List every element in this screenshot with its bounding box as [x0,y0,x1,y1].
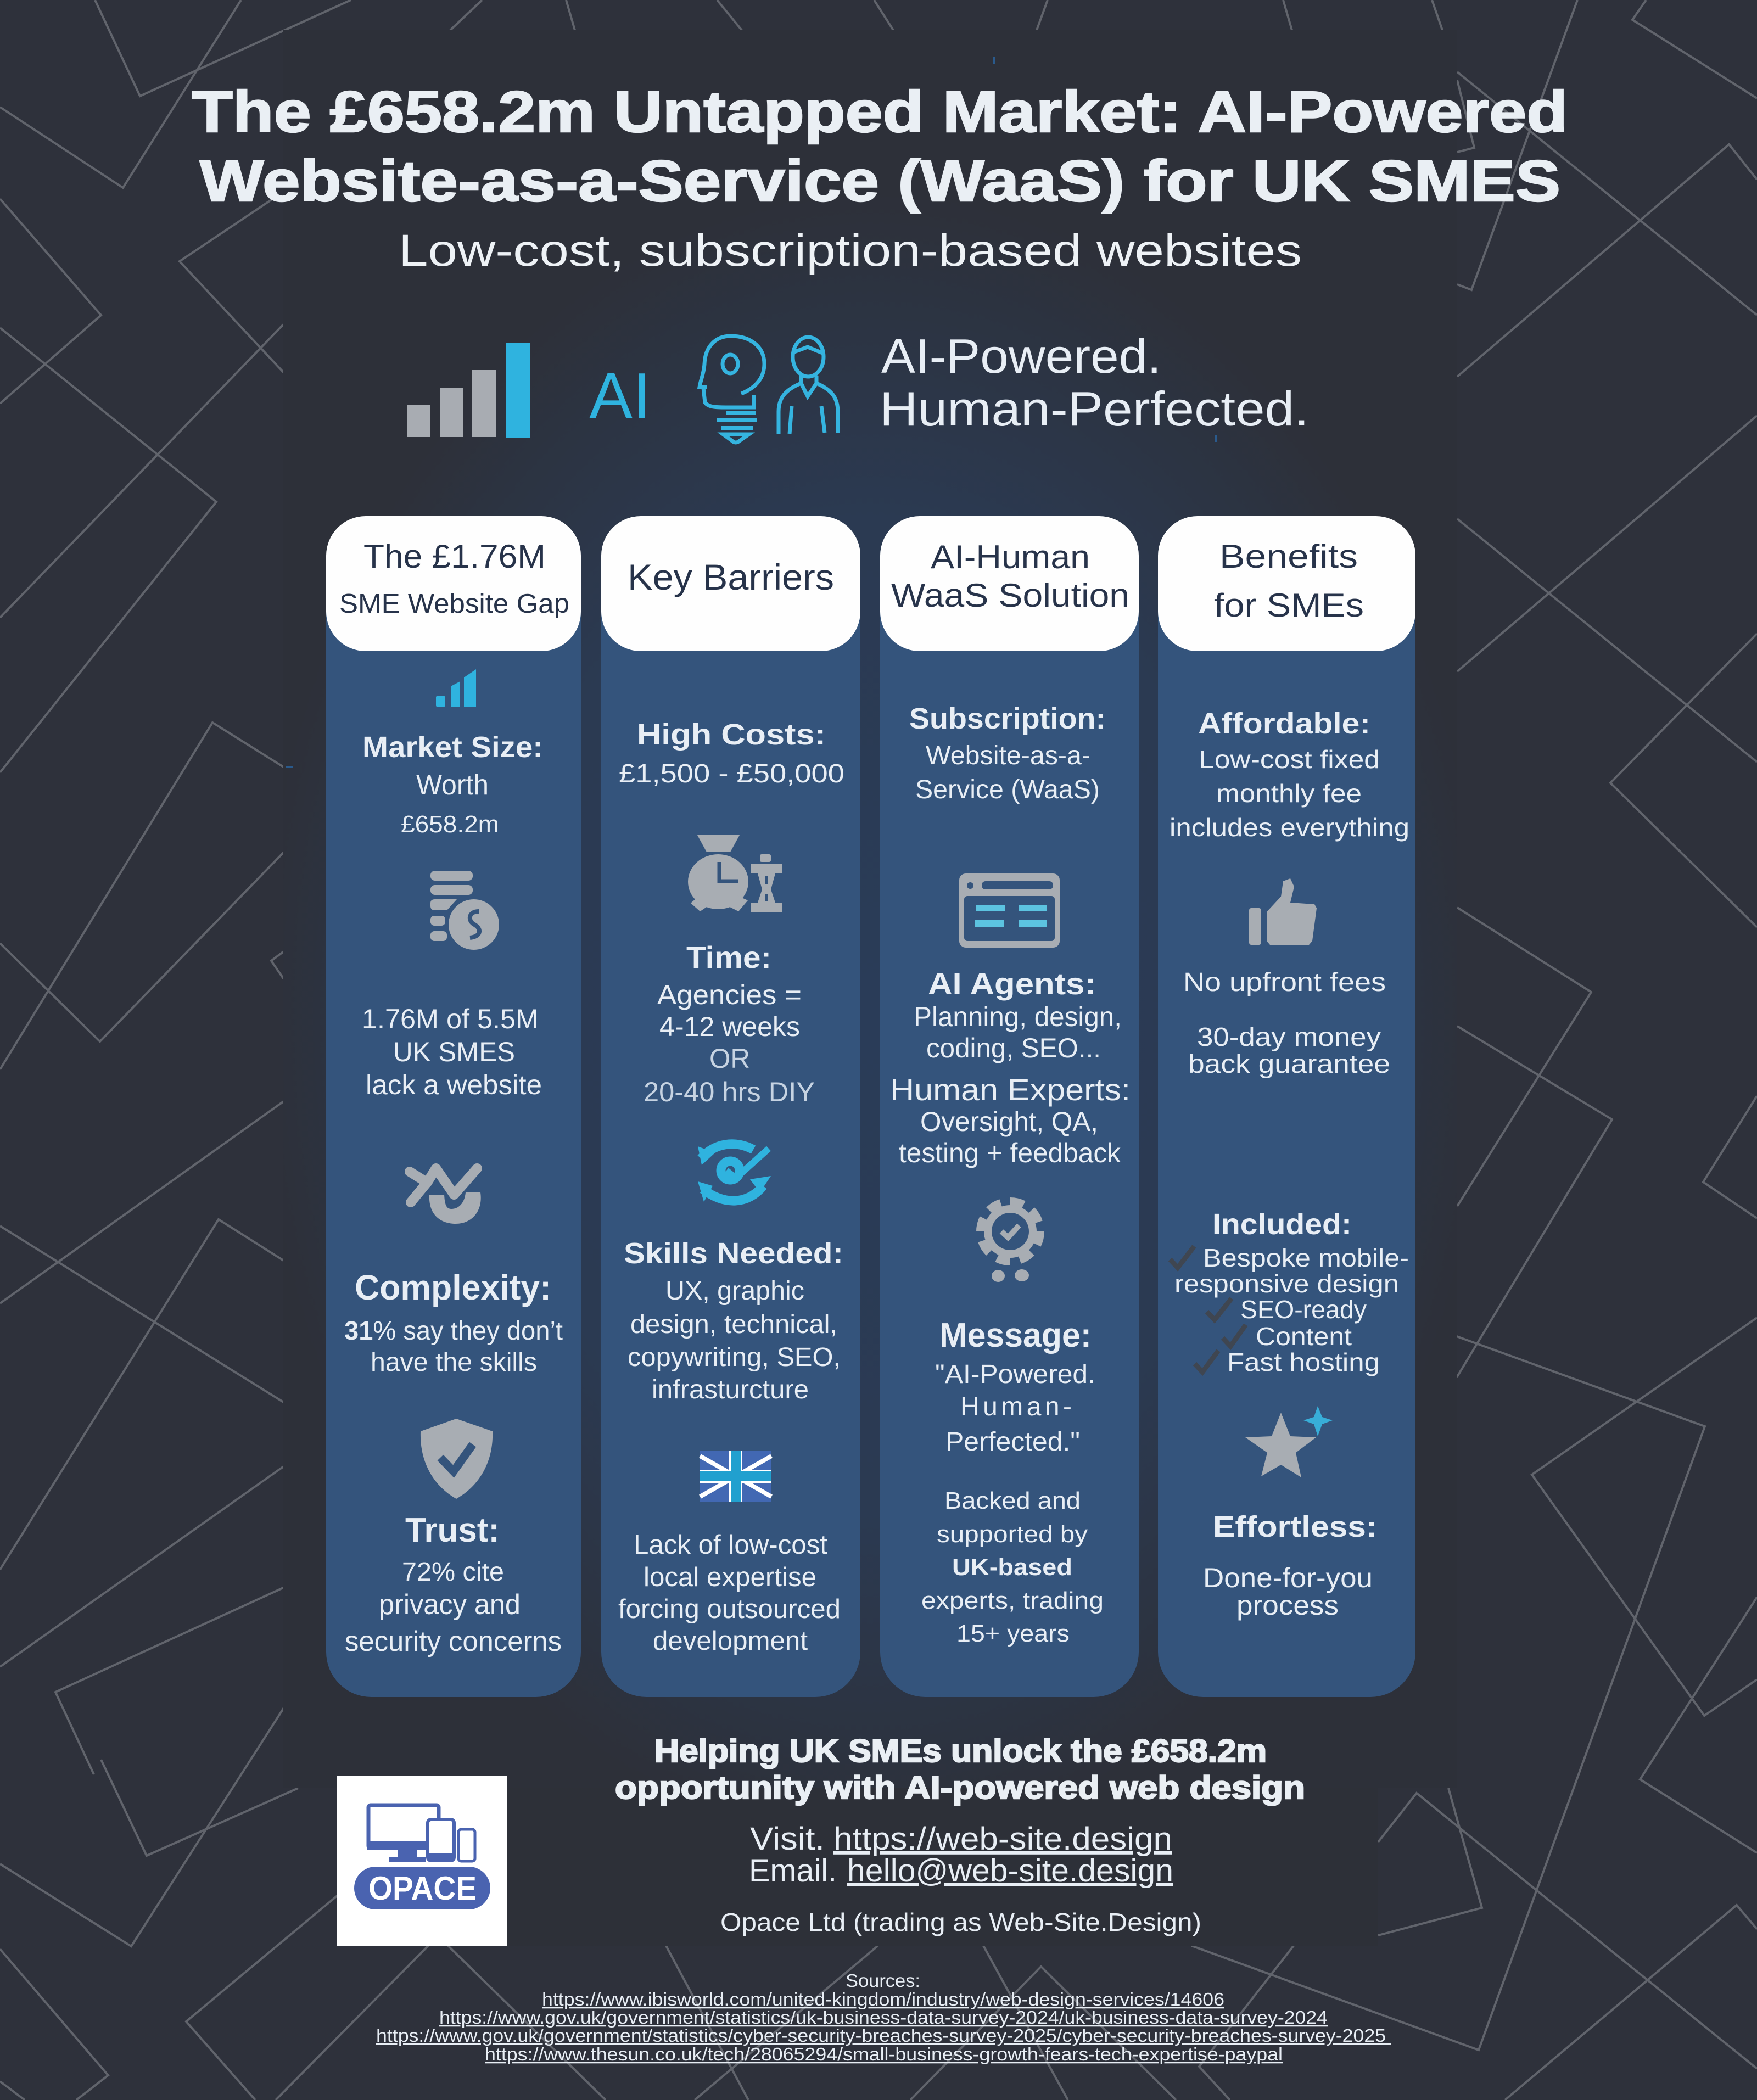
complexity text [344,1268,563,1377]
UK-based backing text: UK-based [952,1554,1072,1581]
title: Website-as-a-Service (WaaS) for UK SMES [200,149,1560,214]
time text [644,940,815,1107]
heading: the £1.76M SME website gap: The £1.76M [363,538,546,575]
AI agents text: Planning, design, [914,1001,1122,1032]
high costs text: High Costs: [637,718,826,751]
included list: Bespoke mobile- [1203,1244,1409,1272]
icon: thumbs up [1249,878,1317,945]
contact details: Visit. [750,1821,825,1857]
heading: the £1.76M SME website gap: SME Website Gap [339,589,569,619]
call to action heading: opportunity with AI-powered web design [615,1770,1305,1806]
panel: key barriers [601,516,860,1697]
icon: eye and cycle arrows [698,1144,771,1202]
human experts text [890,1072,1131,1168]
heading: AI-human WaaS solution: WaaS Solution [891,577,1129,614]
market size text [362,731,543,838]
contact details: Email. [749,1853,837,1889]
logo: Opace [337,1776,507,1946]
included list [1170,1208,1409,1376]
icon: UK flag [700,1451,771,1502]
message text: Perfected." [945,1427,1080,1457]
market size text: Worth [416,769,489,801]
local expertise text: forcing outsourced [618,1594,841,1624]
affordable text: Low-cost fixed [1199,745,1380,774]
time text: Agencies = [657,979,802,1010]
sources: Sources: [846,1970,920,1991]
trust text: Trust: [405,1511,500,1549]
skills needed text [624,1237,843,1404]
message text: "AI-Powered. [935,1360,1095,1389]
affordable text [1170,707,1409,842]
call to action heading: Helping UK SMEs unlock the £658.2m [654,1733,1267,1769]
subtitle: Low-cost, subscription-based websites [399,226,1302,276]
trust text [345,1511,562,1657]
contact details: https://web-site.design [833,1821,1172,1857]
contact details [749,1821,1173,1889]
high costs text: £1,500 - £50,000 [619,759,844,788]
company name: Opace Ltd (trading as Web-Site.Design) [720,1908,1201,1936]
included list: Included: [1212,1208,1352,1241]
tagline: Human-Perfected. [880,382,1309,436]
time text: OR [709,1043,750,1074]
AI agents text: coding, SEO... [926,1033,1101,1063]
UK-based backing text [921,1487,1104,1647]
heading: AI-human WaaS solution [891,539,1129,614]
guarantee text [1183,968,1390,1079]
SME website statistic: UK SMES [393,1037,515,1067]
title [192,80,1568,214]
time text: 20-40 hrs DIY [644,1077,815,1107]
icon: AI head lightbulb [700,336,764,443]
small blue specks [286,57,1217,768]
market size text: Market Size: [362,731,543,764]
local expertise text: development [653,1626,808,1656]
skills needed text: copywriting, SEO, [628,1343,841,1372]
market size text: £658.2m [401,811,499,838]
SME website statistic: 1.76M of 5.5M [362,1004,539,1034]
icon: blue bars [436,669,476,707]
AI label: AI [589,360,651,433]
heading: benefits for SMEs: for SMEs [1214,587,1364,624]
UK-based backing text: Backed and [944,1487,1081,1514]
guarantee text: No upfront fees [1183,968,1386,997]
effortless text: process [1236,1590,1339,1621]
UK-based backing text: experts, trading [921,1587,1104,1614]
heading: the £1.76M SME website gap [339,538,569,619]
central panel backdrop [283,30,1457,1946]
logo: Opace: OPACE [368,1870,477,1907]
panel: benefits for SMEs [1158,516,1415,1697]
icon: browser window [959,873,1060,948]
contact details: hello@web-site.design [847,1853,1173,1889]
message text: Message: [939,1317,1092,1354]
skills needed text: infrasturcture [652,1375,809,1404]
icon: rising bars [407,343,530,438]
icon: money bag clock and hourglass [688,835,782,912]
tagline [880,329,1309,436]
subscription text: Service (WaaS) [915,775,1100,804]
sources: https://www.thesun.co.uk/tech/28065294/small-business-growth-fears-tech-expertise-paypal [485,2044,1283,2064]
included list: SEO-ready [1240,1295,1367,1324]
heading: key barriers: Key Barriers [628,557,834,597]
UK-based backing text: supported by [937,1521,1088,1548]
effortless text [1203,1510,1377,1621]
icon: human expert [779,337,838,434]
AI agents text [914,966,1122,1063]
subscription text: Website-as-a- [926,741,1090,770]
affordable text: Affordable: [1198,707,1370,740]
high costs text [619,718,844,788]
skills needed text: UX, graphic [665,1276,804,1306]
call to action heading [615,1733,1305,1806]
skills needed text: design, technical, [630,1310,837,1339]
guarantee text: 30-day money [1197,1023,1381,1052]
affordable text: includes everything [1170,813,1409,842]
sources: https://www.gov.uk/government/statistics/cyber-security-breaches-survey-2025/cyber-security-breaches-survey-2025 [376,2025,1391,2046]
local expertise text: local expertise [644,1563,816,1592]
heading: benefits for SMEs: Benefits [1219,538,1358,575]
SME website statistic: lack a website [366,1069,542,1100]
guarantee text: back guarantee [1188,1050,1390,1079]
heading: benefits for SMEs [1214,538,1364,624]
complexity text: have the skills [371,1348,537,1377]
tagline: AI-Powered. [881,329,1161,383]
heading: AI-human WaaS solution: AI-Human [931,539,1090,575]
UK-based backing text: 15+ years [956,1620,1070,1647]
effortless text: Done-for-you [1203,1563,1373,1593]
included list: Fast hosting [1227,1348,1380,1376]
sources: https://www.ibisworld.com/united-kingdom/industry/web-design-services/14606 [542,1989,1224,2009]
local expertise text: Lack of low-cost [634,1530,827,1560]
effortless text: Effortless: [1213,1510,1377,1543]
included list: responsive design [1174,1269,1399,1298]
trust text: security concerns [345,1626,562,1657]
affordable text: monthly fee [1216,779,1362,808]
trust text: privacy and [379,1589,521,1621]
icon: star with sparkle [1245,1406,1333,1477]
human experts text: Human Experts: [890,1072,1131,1107]
trust text: 72% cite [402,1558,504,1587]
complexity text: Complexity: [355,1268,551,1307]
SME website statistic [362,1004,542,1100]
icon: quality gear [982,1203,1039,1282]
time text: Time: [686,940,771,975]
AI agents text: AI Agents: [928,966,1096,1001]
panel: AI-human WaaS solution [880,516,1139,1697]
sources: https://www.gov.uk/government/statistics/uk-business-data-survey-2024/uk-business-data-survey-2024 [439,2007,1328,2028]
subscription text: Subscription: [909,702,1106,735]
title: The £658.2m Untapped Market: AI-Powered [192,80,1568,144]
icon: complexity [410,1168,481,1224]
message text: Human- [960,1392,1072,1421]
sources [376,1970,1391,2064]
subscription text [909,702,1106,804]
included list: Content [1256,1322,1352,1351]
time text: 4-12 weeks [659,1011,800,1042]
complexity text: 31% say they don’t [344,1317,563,1346]
icon: shield [421,1419,493,1499]
local expertise text [618,1530,841,1656]
message text [935,1317,1095,1457]
skills needed text: Skills Needed: [624,1237,843,1270]
panel: SME website gap [326,516,581,1697]
icon: coins [430,871,499,950]
human experts text: testing + feedback [899,1138,1121,1168]
human experts text: Oversight, QA, [920,1106,1098,1137]
